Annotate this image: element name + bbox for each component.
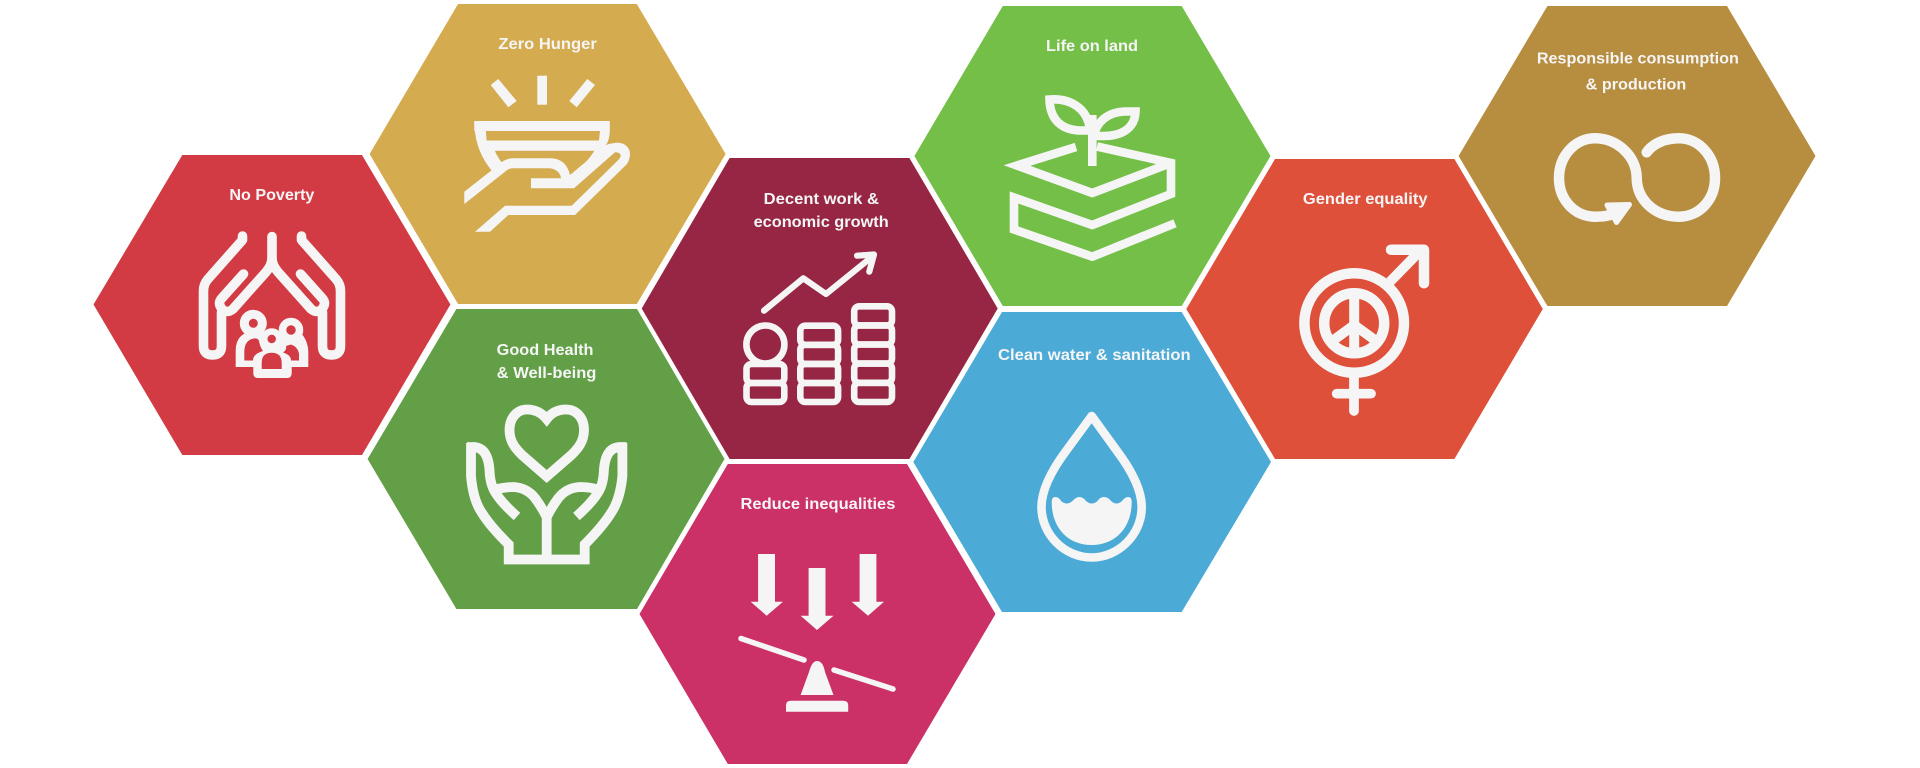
- heading: economic growth: economic growth: [754, 214, 889, 231]
- icon: arrows and seesaw: [741, 554, 893, 712]
- heading: zero hunger: Zero Hunger: [498, 36, 597, 53]
- heading: clean water: Clean water & sanitation: [998, 347, 1191, 364]
- icon: infinity loop arrow: [1559, 138, 1715, 222]
- panel: good health: [368, 309, 724, 609]
- icon: hands holding heart: [467, 410, 626, 560]
- heading: production: & production: [1586, 76, 1686, 93]
- panel: decent work: [642, 158, 998, 459]
- icon: bowl on hand: [464, 76, 630, 232]
- hexagon: responsible consumption: [1459, 6, 1816, 306]
- heading: responsible consumption: Responsible consumption: [1537, 50, 1739, 67]
- heading: good health: Good Health: [497, 342, 594, 359]
- panel: life on land: [914, 6, 1270, 306]
- heading: gender equality: Gender equality: [1303, 191, 1428, 208]
- icon: gender and peace symbol: [1304, 250, 1424, 411]
- panel: gender equality: [1186, 159, 1543, 459]
- hexagon: life on land: [914, 6, 1270, 306]
- hexagon: clean water: [913, 312, 1271, 612]
- icon: coins and growth arrow: [746, 254, 892, 402]
- panel: no poverty: [94, 155, 450, 455]
- icon: hands sheltering family: [204, 236, 340, 378]
- icon: water drop: [1042, 416, 1142, 558]
- hexagon: reduce inequalities: [640, 464, 996, 764]
- heading: well-being: & Well-being: [497, 365, 596, 382]
- panel: zero hunger: [370, 4, 726, 304]
- panel: clean water: [913, 312, 1271, 612]
- icon: sprout on soil layers: [1014, 99, 1175, 257]
- panel: reduce inequalities: [640, 464, 996, 764]
- heading: decent work: Decent work &: [764, 191, 879, 208]
- heading: no poverty: No Poverty: [229, 187, 315, 204]
- heading: life on land: Life on land: [1046, 38, 1138, 55]
- hexagon: zero hunger: [370, 4, 726, 304]
- hexagon: gender equality: [1186, 159, 1543, 459]
- heading: reduce inequalities: Reduce inequalities: [740, 496, 896, 513]
- panel: responsible consumption: [1459, 6, 1816, 306]
- hexagon: good health: [368, 309, 724, 609]
- hexagon: no poverty: [94, 155, 450, 455]
- hexagon: decent work: [642, 158, 998, 459]
